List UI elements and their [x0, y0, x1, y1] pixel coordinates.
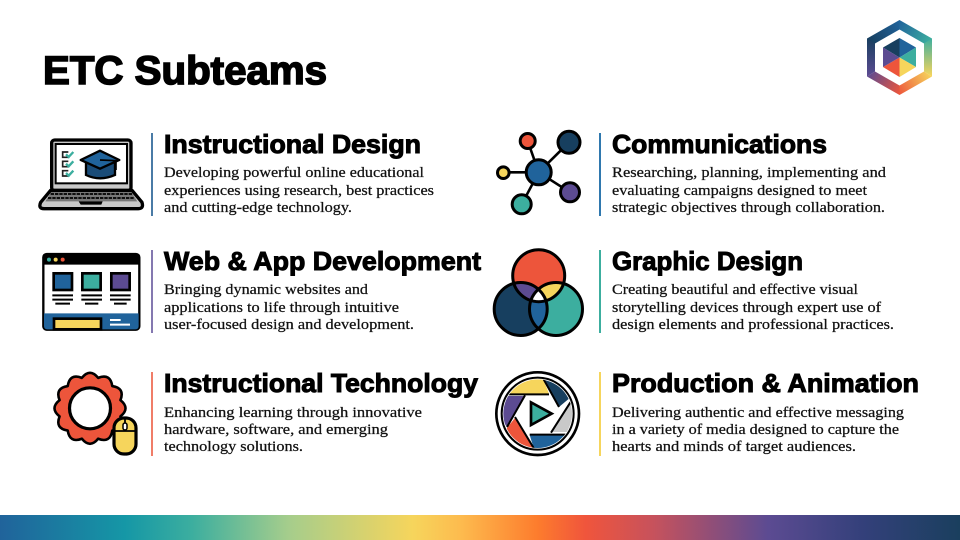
description: strategic objectives through collaboration. — [612, 200, 885, 216]
panel: Communications — [498, 129, 887, 216]
icon: laptop with graduation cap — [40, 140, 143, 209]
icon: network nodes — [498, 131, 580, 214]
panel: Instructional Technology — [54, 368, 479, 456]
icon: camera aperture with play button — [496, 372, 579, 455]
description — [612, 405, 904, 455]
description: Bringing dynamic websites and — [164, 282, 369, 298]
divider: Communications — [599, 133, 601, 216]
divider: Web & App Development — [151, 250, 153, 333]
description: and cutting-edge technology. — [164, 200, 352, 216]
icon: ETC hexagon logo — [867, 20, 932, 95]
title: ETC Subteams — [43, 49, 327, 93]
description — [164, 282, 414, 333]
panel: Production & Animation — [496, 368, 919, 456]
panel: Graphic Design — [494, 246, 894, 336]
heading: Web & App Development — [164, 246, 481, 276]
footer gradient bar — [0, 515, 960, 540]
divider: Graphic Design — [599, 250, 601, 333]
description: hearts and minds of target audiences. — [612, 439, 856, 455]
heading: Communications — [612, 129, 827, 159]
description: user-focused design and development. — [164, 317, 414, 333]
description: storytelling devices through expert use of — [612, 300, 881, 316]
description: Developing powerful online educational — [164, 165, 424, 181]
description: evaluating campaigns designed to meet — [612, 183, 867, 199]
icon: overlapping colour circles — [494, 250, 582, 336]
divider: Production & Animation — [599, 372, 601, 456]
description: applications to life through intuitive — [164, 300, 399, 316]
icon: gear and mouse — [54, 373, 136, 454]
heading: Instructional Design — [164, 129, 421, 159]
heading: Graphic Design — [612, 246, 803, 276]
heading: Production & Animation — [612, 368, 919, 398]
panel: Instructional Design — [40, 129, 434, 216]
description: Creating beautiful and effective visual — [612, 282, 858, 298]
heading: Instructional Technology — [164, 368, 479, 398]
panel: Web & App Development — [43, 246, 481, 333]
description: Delivering authentic and effective messaging — [612, 405, 904, 421]
description: Researching, planning, implementing and — [612, 165, 887, 181]
description — [612, 165, 887, 216]
description: Enhancing learning through innovative — [164, 405, 422, 421]
icon: browser window — [43, 254, 139, 330]
description: hardware, software, and emerging — [164, 422, 388, 438]
description: technology solutions. — [164, 439, 303, 455]
description: experiences using research, best practices — [164, 183, 434, 199]
divider: Instructional Design — [151, 133, 153, 216]
description: design elements and professional practices. — [612, 317, 894, 333]
description: in a variety of media designed to capture the — [612, 422, 899, 438]
description — [164, 405, 422, 455]
description — [612, 282, 894, 333]
description — [164, 165, 434, 216]
divider: Instructional Technology — [151, 372, 153, 456]
